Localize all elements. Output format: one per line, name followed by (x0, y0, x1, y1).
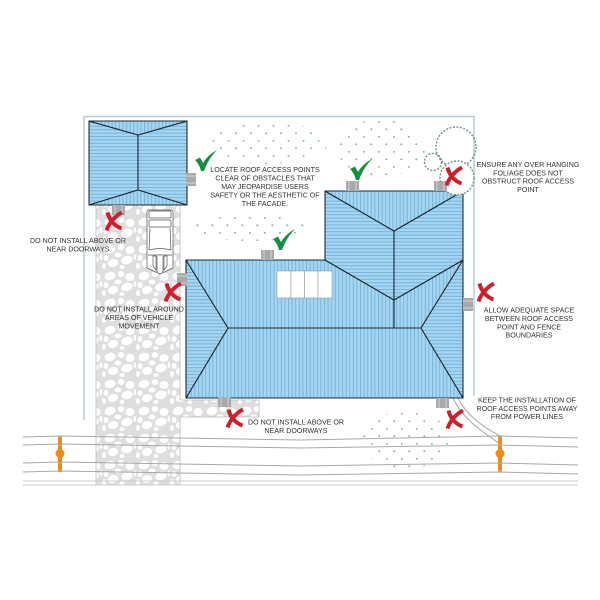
skylight (277, 271, 332, 298)
text: vehicle movement: MOVEMENT (118, 322, 160, 330)
text: foliage: OBSTRUCT ROOF ACCESS (482, 178, 574, 186)
trees (424, 127, 476, 195)
text: locate access points: MAY JEOPARDISE USERS (221, 183, 309, 191)
text: fence boundaries: ALLOW ADEQUATE SPACE (484, 306, 574, 314)
power pole left (56, 436, 64, 472)
text: power lines: KEEP THE INSTALLATION OF (478, 396, 577, 404)
garage roof (89, 121, 187, 205)
tick and cross marks (106, 150, 494, 428)
text: fence boundaries: BETWEEN ROOF ACCESS (485, 315, 573, 323)
text: fence boundaries: POINT AND FENCE (497, 324, 561, 332)
text: foliage: ENSURE ANY OVER HANGING (477, 161, 579, 169)
house roof (186, 191, 463, 398)
car (147, 210, 173, 274)
text: power lines: FROM POWER LINES (491, 413, 563, 421)
text: doorways bottom: DO NOT INSTALL ABOVE OR (248, 418, 344, 426)
text: foliage: FOLIAGE DOES NOT (493, 170, 564, 178)
text: vehicle movement: AREAS OF VEHICLE (105, 314, 173, 322)
text: doorways left: DO NOT INSTALL ABOVE OR (30, 237, 126, 245)
text: locate access points: LOCATE ROOF ACCESS POINTS (210, 166, 320, 174)
text: doorways bottom: NEAR DOORWAYS (265, 427, 328, 435)
text: locate access points: THE FACADE. (242, 200, 288, 208)
text: locate access points: CLEAR OF OBSTACLES THAT (215, 174, 315, 182)
text: locate access points: SAFETY OR THE AESTHETIC OF (210, 192, 320, 200)
power lines (23, 398, 578, 485)
text: fence boundaries: BOUNDARIES (506, 332, 553, 340)
stone driveway (96, 205, 259, 485)
text: foliage: POINT (517, 186, 539, 194)
power pole right (496, 436, 504, 472)
text: vehicle movement: DO NOT INSTALL AROUND (94, 306, 184, 314)
roof access points (112, 173, 473, 408)
site boundary fence (84, 116, 474, 420)
text: power lines: ROOF ACCESS POINTS AWAY (476, 405, 578, 413)
planting dots (190, 119, 450, 469)
text: doorways left: NEAR DOORWAYS (47, 246, 110, 254)
